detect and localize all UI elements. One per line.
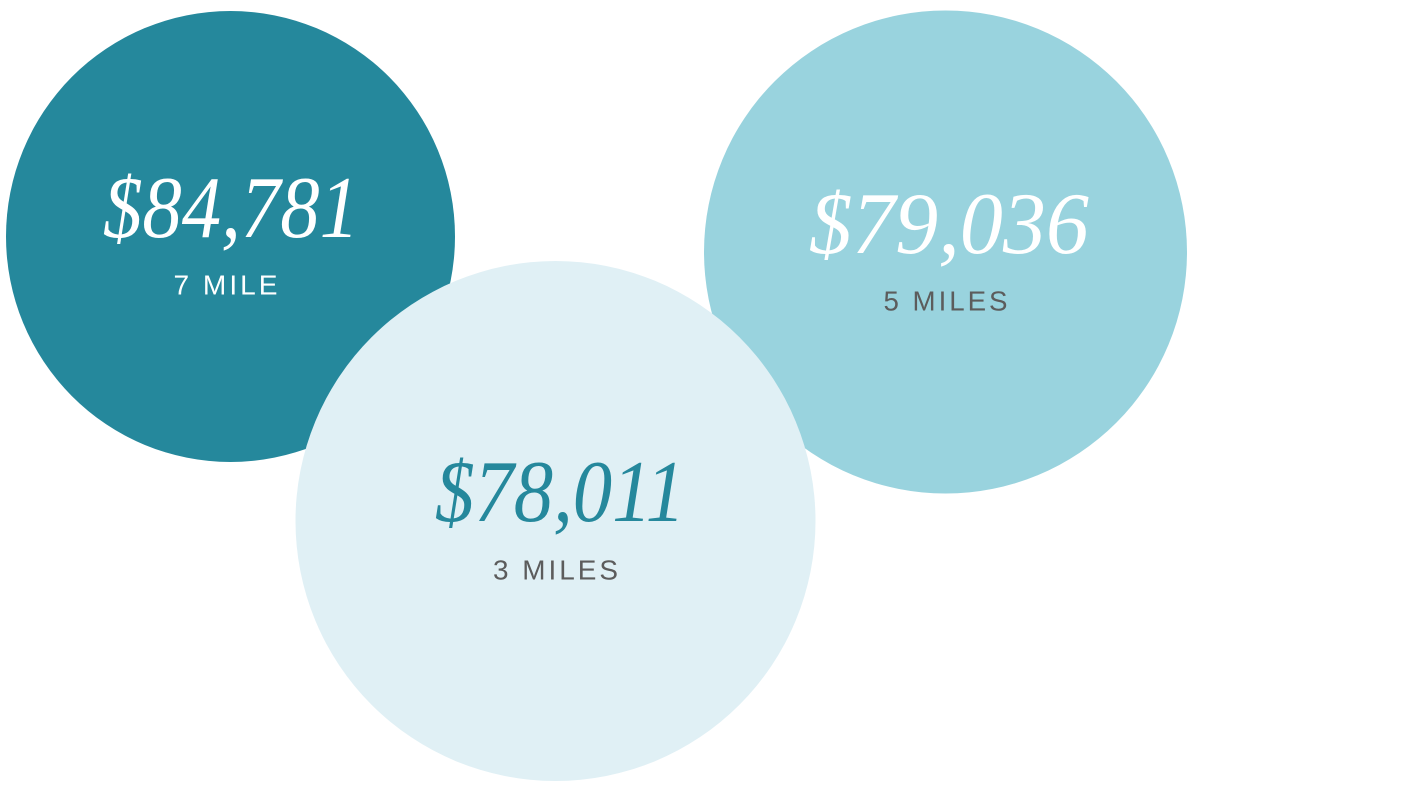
- value: 3 miles income: $78,011: [435, 444, 685, 541]
- label: 7 mile: 7 MILE: [174, 270, 280, 300]
- label: 3 miles: 3 MILES: [493, 554, 621, 586]
- value: 5 miles income: $79,036: [809, 176, 1089, 273]
- circle: 5 miles: [704, 10, 1187, 494]
- value: 7 mile income: $84,781: [103, 160, 359, 257]
- label: 5 miles: 5 MILES: [884, 286, 1010, 316]
- circle: 7 mile: [6, 11, 455, 462]
- circle: 3 miles: [296, 261, 816, 781]
